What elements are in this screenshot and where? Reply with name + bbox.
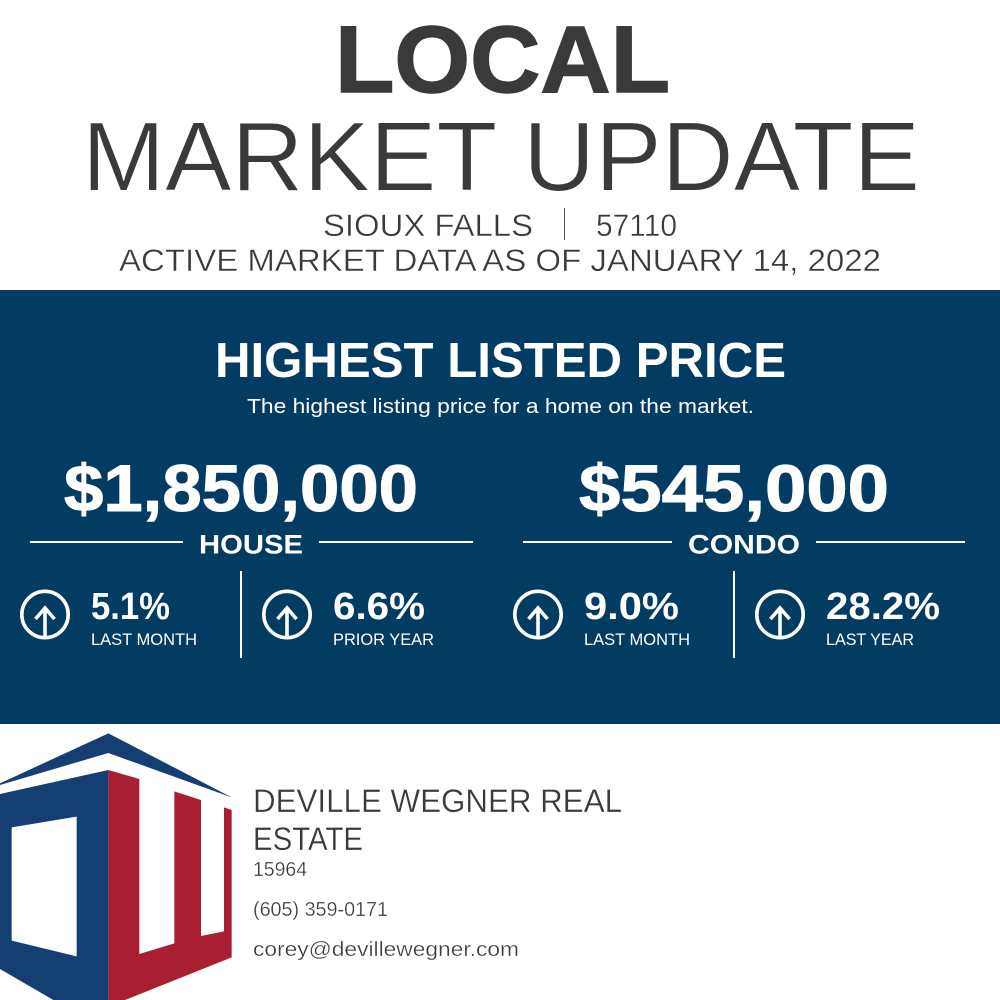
icon: up arrow <box>22 591 68 638</box>
condo price: $545,000 <box>579 451 889 525</box>
title: LOCAL <box>335 7 670 113</box>
location line: 57110 <box>596 207 677 243</box>
phone: (605) 359-0171 <box>253 898 388 921</box>
logo <box>0 733 232 1000</box>
contact details <box>253 783 622 961</box>
stat: condo last year <box>757 586 940 649</box>
company name <box>253 783 622 857</box>
icon: up arrow <box>757 591 803 638</box>
stat: condo last month <box>515 586 690 649</box>
stat: house prior year <box>264 586 434 649</box>
stat: house prior year: PRIOR YEAR <box>333 630 434 649</box>
stat: condo last month: LAST MONTH <box>584 630 690 649</box>
panel description: The highest listing price for a home on the market. <box>247 396 754 418</box>
icon: up arrow <box>264 591 310 638</box>
email: corey@devillewegner.com <box>253 938 519 961</box>
company name: ESTATE <box>253 821 363 857</box>
stat: condo last year: LAST YEAR <box>826 630 914 649</box>
house price: $1,850,000 <box>64 451 418 525</box>
stat: house last month: 5.1% <box>91 586 170 628</box>
icon: up arrow <box>515 591 561 638</box>
stat: condo last year: 28.2% <box>826 586 940 628</box>
stat: condo last month: 9.0% <box>584 586 679 628</box>
stat: house last month: LAST MONTH <box>91 630 197 649</box>
date line: ACTIVE MARKET DATA AS OF JANUARY 14, 2022 <box>119 242 881 278</box>
location line <box>323 207 677 243</box>
panel heading: HIGHEST LISTED PRICE <box>215 334 786 388</box>
license number: 15964 <box>253 858 307 881</box>
company name: DEVILLE WEGNER REAL <box>253 783 622 819</box>
panel: highest listed price <box>0 290 1000 724</box>
title: MARKET UPDATE <box>82 102 920 212</box>
stat: house last month <box>22 586 197 649</box>
divider <box>733 571 735 658</box>
condo label with rules: CONDO <box>688 530 800 560</box>
divider <box>240 571 242 658</box>
house label with rules: HOUSE <box>199 530 303 560</box>
location line: SIOUX FALLS <box>323 207 533 243</box>
title <box>82 7 920 212</box>
stat: house prior year: 6.6% <box>333 586 425 628</box>
